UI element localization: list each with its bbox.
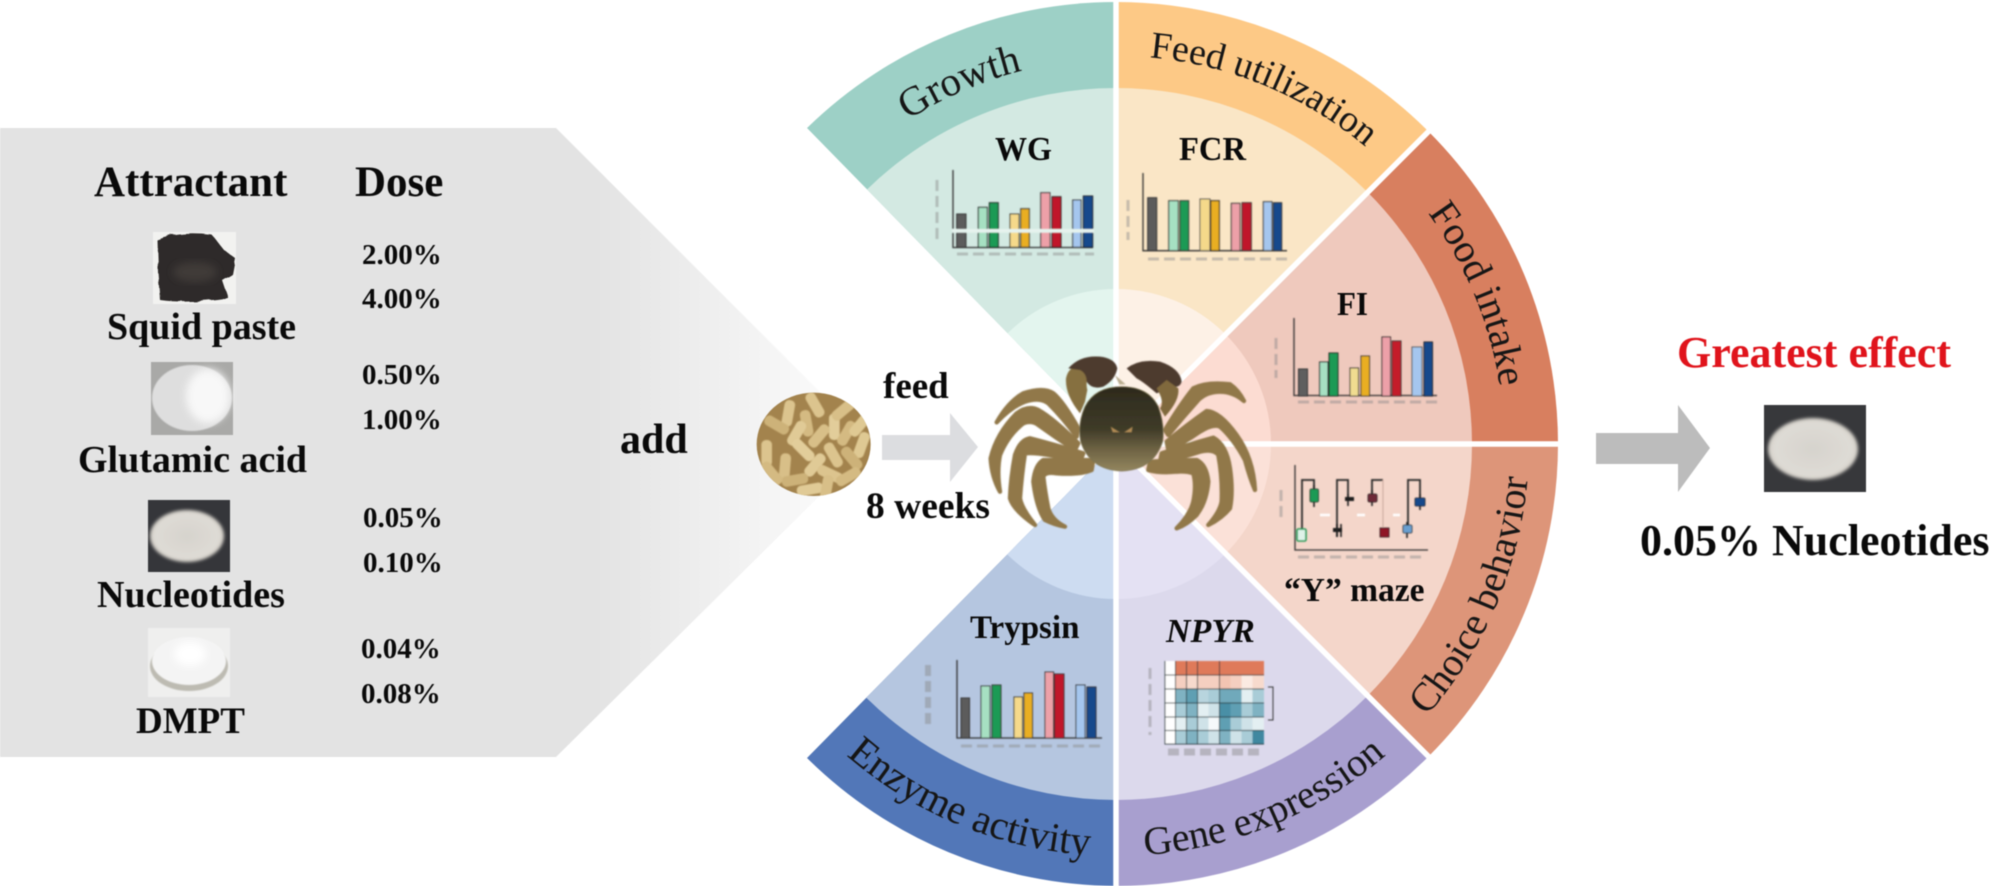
heading: Attractant: Attractant	[94, 159, 288, 206]
sector: Growth: Growth	[899, 46, 1022, 116]
chart: Y maze box plot	[1281, 465, 1428, 557]
doses: glutamic acid: 0.50%	[362, 359, 442, 391]
icon: feed pellets photo	[755, 390, 875, 502]
doses: squid paste	[362, 239, 442, 315]
crab carapace	[1080, 387, 1163, 471]
sector: Growth	[806, 2, 1114, 410]
label: Nucleotides: Nucleotides	[97, 574, 285, 616]
sector: Feed utilization: Feed utilization	[1150, 32, 1374, 147]
sector: Feed utilization	[1118, 1, 1427, 400]
doses: glutamic acid: 1.00%	[362, 404, 442, 436]
crab legs	[991, 384, 1255, 528]
label: feed: feed	[883, 366, 949, 407]
doses: squid paste: 2.00%	[362, 239, 442, 271]
chart: Trypsin bar chart	[928, 660, 1102, 746]
heading: FI: FI	[1337, 286, 1368, 323]
doses: nucleotides: 0.05%	[363, 502, 443, 534]
photo: glutamic acid	[151, 362, 233, 435]
label: Glutamic acid: Glutamic acid	[78, 439, 307, 481]
callout: Greatest effect: Greatest effect	[1677, 328, 1951, 377]
doses: glutamic acid	[362, 359, 442, 436]
sector: Enzyme activity	[806, 464, 1114, 886]
label: DMPT: DMPT	[136, 701, 245, 742]
panel background chevron	[0, 128, 872, 757]
crab claws	[1066, 356, 1182, 417]
heading: NPYR: NPYR	[1165, 613, 1255, 650]
photo: DMPT	[148, 628, 230, 697]
doses: DMPT	[361, 633, 441, 710]
doses: nucleotides: 0.10%	[363, 547, 443, 579]
doses: squid paste: 4.00%	[362, 283, 442, 315]
sector: Food intake	[1158, 133, 1559, 442]
label: 8 weeks: 8 weeks	[866, 486, 990, 527]
wheel: six outcome sectors	[806, 1, 1559, 886]
chart: FCR bar chart	[1128, 173, 1288, 259]
heading: FCR: FCR	[1179, 131, 1246, 168]
sector: Enzyme activity: Enzyme activity	[846, 735, 1092, 864]
label: add: add	[620, 417, 688, 463]
photo: squid paste	[153, 232, 236, 304]
sector: Choice behavior: Choice behavior	[1411, 476, 1528, 712]
heading: Dose: Dose	[355, 159, 443, 206]
chart: NPYR heatmap	[1150, 661, 1273, 752]
doses: nucleotides	[363, 502, 443, 579]
icon: mitten crab	[991, 356, 1255, 528]
label: Squid paste: Squid paste	[107, 306, 296, 348]
result label: 0.05% Nucleotides	[1640, 516, 1990, 565]
chart: FI bar chart	[1276, 318, 1438, 402]
sector: Choice behavior	[1142, 446, 1559, 755]
panel: attractant list	[0, 128, 872, 757]
heading: Y maze: “Y” maze	[1284, 572, 1424, 609]
doses: DMPT: 0.04%	[361, 633, 441, 665]
sector: Gene expression	[1118, 468, 1427, 886]
arrow: feed to crab	[882, 413, 978, 482]
arrow: result arrow	[1596, 405, 1710, 492]
photo: nucleotides result	[1764, 405, 1866, 492]
sector: Gene expression: Gene expression	[1144, 744, 1386, 855]
heading: WG: WG	[995, 131, 1052, 168]
photo: nucleotides	[148, 500, 230, 572]
doses: DMPT: 0.08%	[361, 678, 441, 710]
chart: WG bar chart	[937, 170, 1094, 254]
sector: Food intake: Food intake	[1428, 198, 1522, 386]
heading: Trypsin: Trypsin	[970, 610, 1079, 646]
